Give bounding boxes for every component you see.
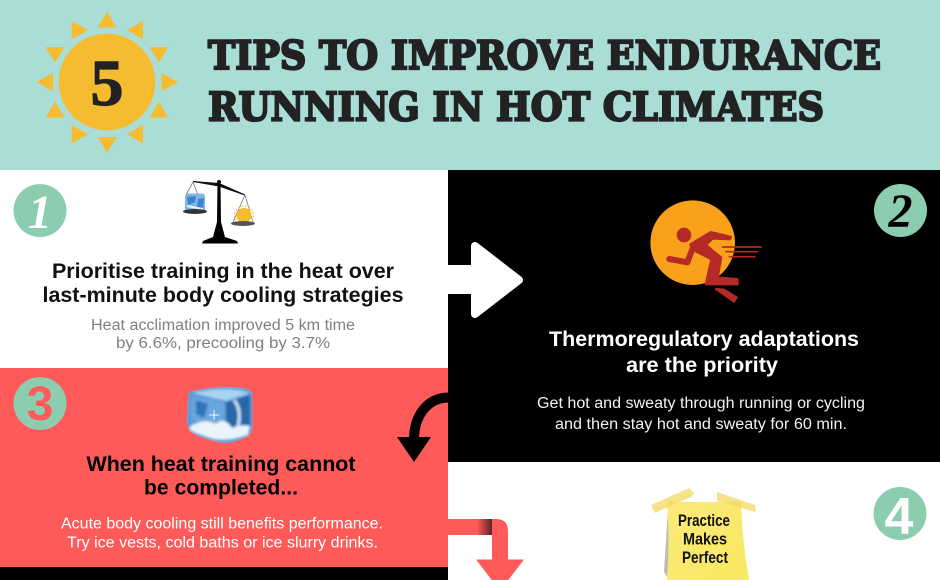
title xyxy=(208,33,881,130)
body text xyxy=(61,516,383,552)
badge: number 2 xyxy=(874,184,927,238)
panel: tip 3 xyxy=(0,368,448,567)
arrow: black curved, tip 2 to tip 3 xyxy=(397,398,448,462)
icon: balance scale with ice and sun xyxy=(183,180,255,244)
badge: number 3: 3 xyxy=(27,378,53,431)
header band xyxy=(0,0,940,170)
body text: by 6.6%, precooling by 3.7% xyxy=(116,335,330,352)
arrow: red, tip 3 to tip 4 xyxy=(448,519,523,580)
icon: sticky note: Perfect xyxy=(682,548,728,567)
icon: sticky note: Makes xyxy=(683,530,727,548)
panel: tip 4 xyxy=(448,462,940,580)
icon: sticky note xyxy=(651,488,756,580)
heading: Thermoregulatory adaptations xyxy=(549,328,859,351)
panel: tip 1 xyxy=(0,170,448,368)
badge: number 1: 1 xyxy=(28,186,52,239)
body text: Get hot and sweaty through running or cycling xyxy=(537,395,865,412)
heading xyxy=(42,260,404,307)
title: RUNNING IN HOT CLIMATES xyxy=(208,84,824,130)
icon: sun with number 5 xyxy=(37,12,178,153)
badge: number 1 xyxy=(14,184,66,239)
arrow: white, tip 1 to tip 2 xyxy=(448,246,519,314)
badge: number 4: 4 xyxy=(885,488,914,546)
badge: number 3 xyxy=(14,377,66,431)
heading xyxy=(549,328,859,377)
heading xyxy=(86,453,356,500)
heading: be completed... xyxy=(144,476,298,500)
icon: ice cube xyxy=(187,388,252,442)
body text xyxy=(91,317,355,352)
body text xyxy=(537,395,865,433)
title: TIPS TO IMPROVE ENDURANCE xyxy=(208,33,881,79)
icon: sun with number 5: 5 xyxy=(90,47,124,120)
heading: Prioritise training in the heat over xyxy=(52,260,394,283)
body text: Try ice vests, cold baths or ice slurry drinks. xyxy=(67,534,378,552)
badge: number 2: 2 xyxy=(888,185,912,238)
icon: runner in sun xyxy=(650,200,761,302)
badge: number 4 xyxy=(874,487,926,546)
heading: When heat training cannot xyxy=(86,453,356,476)
panel: tip 2 xyxy=(448,170,940,462)
heading: last-minute body cooling strategies xyxy=(42,284,404,307)
icon: sticky note: Practice xyxy=(678,511,730,530)
body text: Heat acclimation improved 5 km time xyxy=(91,317,355,334)
body text: and then stay hot and sweaty for 60 min. xyxy=(555,416,847,433)
panel: tip 5 strip xyxy=(0,567,448,580)
heading: are the priority xyxy=(626,354,778,377)
body text: Acute body cooling still benefits performance. xyxy=(61,516,383,532)
